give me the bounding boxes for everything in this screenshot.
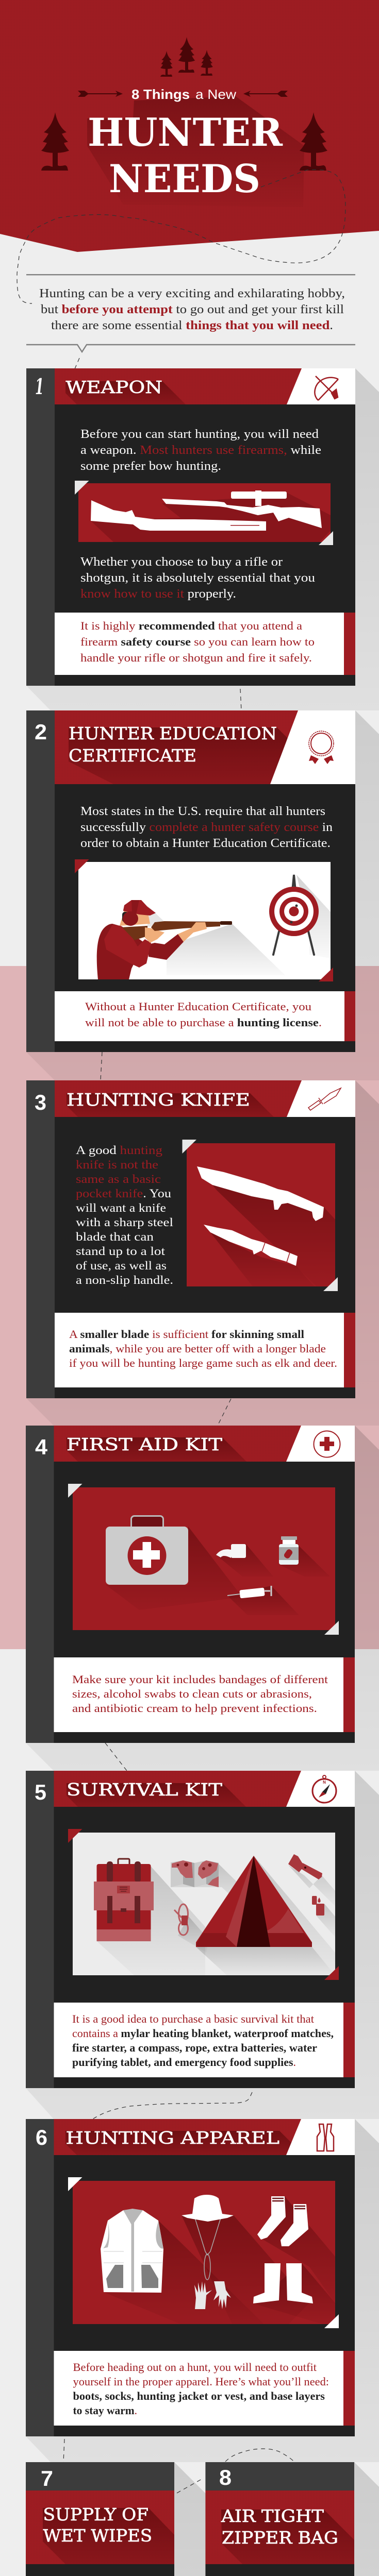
image: rifle and shotgun: [75, 481, 333, 545]
callout: [54, 2351, 355, 2426]
icon: three small pine trees: [160, 37, 213, 77]
number: 3: [35, 1090, 46, 1114]
number: 1: [35, 374, 44, 399]
callout: [55, 1313, 355, 1387]
callout: contains a mylar heating blanket, waterproof matches,: [72, 2027, 334, 2040]
target: [269, 875, 319, 955]
callout: [55, 613, 355, 675]
callout: [54, 1657, 355, 1732]
image: hunting apparel items: [68, 2177, 339, 2328]
number: 6: [36, 2125, 47, 2149]
heading: [221, 2506, 338, 2548]
callout: handle your rifle or shotgun and fire it safely.: [80, 651, 312, 664]
panel: 3 hunting knife: [26, 1080, 355, 1398]
callout: [55, 991, 355, 1041]
text block: stand up to a lot: [76, 1245, 166, 1258]
heading: WEAPON: [66, 377, 162, 397]
number: 2: [35, 720, 47, 744]
callout: firearm safety course so you can learn how to: [80, 635, 315, 648]
icon: rosette: [309, 731, 334, 764]
text block: a weapon. Most hunters use firearms, while: [80, 444, 321, 457]
title: [88, 110, 283, 201]
icon: lighter: [312, 1896, 324, 1916]
callout: animals, while you are better off with a longer blade: [69, 1342, 326, 1355]
icon: flashlight: [288, 1854, 322, 1879]
text block: shotgun, it is absolutely essential that you: [80, 571, 315, 585]
panel: 7 supply of wet wipes: [26, 2462, 174, 2576]
image: hunter aiming at target: [75, 859, 333, 981]
heading: SUPPLY OF: [43, 2504, 149, 2524]
number: 8: [219, 2465, 232, 2489]
icon: compass: N: [323, 1780, 326, 1785]
header bar: [54, 2119, 355, 2155]
icon: tent: [196, 1856, 312, 1947]
panel: 4 first aid kit: [26, 1426, 355, 1743]
header bar: [54, 1771, 355, 1807]
callout: will not be able to purchase a hunting license .: [85, 1016, 322, 1029]
number: 7: [41, 2466, 53, 2490]
icon: vest: [101, 2209, 163, 2293]
icon: syringe: [227, 1586, 271, 1598]
text block: [80, 805, 333, 850]
heading: SURVIVAL KIT: [67, 1780, 222, 1800]
image: two knives: [183, 1140, 338, 1291]
number: 4: [35, 1435, 48, 1459]
heading: HUNTER EDUCATION: [69, 723, 277, 743]
text block: [80, 428, 321, 473]
icon: hat: [182, 2195, 234, 2280]
header bar: [26, 2490, 174, 2564]
subtitle: 8 Things: [131, 87, 190, 102]
intro panel: [26, 274, 355, 352]
icon: bow and arrow: [315, 376, 338, 400]
text block: Most states in the U.S. require that all hunters: [80, 805, 325, 818]
intro text: there are some essential things that you will need .: [51, 319, 333, 332]
text block: will want a knife: [76, 1201, 166, 1214]
icon: boots: [253, 2263, 313, 2303]
text block: some prefer bow hunting.: [80, 460, 221, 473]
icon: bandage roll: [216, 1544, 246, 1558]
icon: vest: [317, 2124, 334, 2151]
text block: blade that can: [76, 1230, 154, 1243]
arrow: left of subtitle: [78, 91, 123, 97]
icon: backpack: [94, 1859, 154, 1941]
icon: right large pine tree: [300, 112, 327, 171]
heading: [43, 2504, 152, 2546]
callout: fire starter, a compass, rope, extra batteries, water: [72, 2041, 317, 2054]
text block: knife is not the: [76, 1158, 158, 1171]
heading: HUNTING KNIFE: [67, 1090, 250, 1110]
callout: if you will be hunting large game such as elk and deer.: [69, 1357, 337, 1369]
callout: Make sure your kit includes bandages of different: [72, 1673, 328, 1686]
icon: pill bottle: [279, 1536, 299, 1565]
text block: [80, 555, 315, 601]
heading: AIR TIGHT: [221, 2506, 324, 2526]
callout: sizes, alcohol swabs to clean cuts or abrasions,: [72, 1687, 312, 1700]
icon: medkit: [106, 1516, 188, 1585]
image: first aid supplies: [68, 1484, 339, 1635]
callout: Without a Hunter Education Certificate, you: [85, 1000, 311, 1013]
text block: pocket knife . You: [76, 1187, 172, 1200]
text block: order to obtain a Hunter Education Certificate.: [80, 837, 331, 850]
header bar: [55, 710, 355, 784]
text block: same as a basic: [76, 1173, 161, 1185]
callout: [54, 2003, 355, 2077]
callout: A smaller blade is sufficient for skinning small: [69, 1328, 304, 1341]
panel: 8 air tight zipper bag: [205, 2462, 354, 2576]
text block: with a sharp steel: [76, 1216, 173, 1229]
callout: It is highly recommended that you attend a: [80, 619, 302, 632]
icon: rope: [174, 1904, 188, 1935]
text block: of use, as well as: [76, 1259, 167, 1272]
number: 5: [35, 1780, 46, 1804]
text block: A good hunting: [76, 1144, 163, 1157]
icon: gloves: [194, 2281, 231, 2309]
image: survival gear: [68, 1829, 339, 1980]
callout: It is a good idea to purchase a basic survival kit that: [72, 2012, 314, 2025]
icon: medical cross: [314, 1431, 340, 1457]
text block: a non-slip handle.: [76, 1274, 173, 1286]
hero banner: [0, 0, 379, 252]
icon: map: [171, 1860, 219, 1887]
text block: Before you can start hunting, you will need: [80, 428, 319, 441]
title: HUNTER: [88, 110, 283, 155]
callout: Before heading out on a hunt, you will need to outfit: [73, 2361, 317, 2374]
callout: and antibiotic cream to help prevent infections.: [72, 1702, 317, 1715]
panel: 5 survival kit: [26, 1771, 355, 2088]
callout: purifying tablet, and emergency food supplies.: [72, 2056, 296, 2069]
callout: boots, socks, hunting jacket or vest, and base layers: [73, 2389, 325, 2402]
header bar: [205, 2490, 354, 2564]
icon: socks: [257, 2196, 308, 2246]
text block: [76, 1144, 173, 1286]
subtitle: a New: [195, 87, 236, 102]
callout: to stay warm.: [73, 2404, 137, 2417]
heading: FIRST AID KIT: [67, 1434, 222, 1454]
text block: know how to use it properly.: [80, 587, 236, 601]
icon: knife: [308, 1088, 341, 1110]
subtitle: [131, 87, 236, 102]
panel: 2 hunter education certificate: [26, 710, 355, 1052]
intro text: Hunting can be a very exciting and exhilarating hobby,: [39, 287, 345, 300]
arrow: right of subtitle: [243, 91, 288, 97]
header bar: [54, 1426, 355, 1462]
icon: left large pine tree: [41, 112, 69, 171]
heading: ZIPPER BAG: [222, 2528, 338, 2548]
callout: yourself in the proper apparel. Here’s what you’ll need:: [73, 2375, 329, 2388]
title: NEEDS: [109, 156, 260, 201]
heading: [69, 723, 277, 766]
icon: compass: [312, 1775, 336, 1803]
text block: successfully complete a hunter safety course in: [80, 821, 333, 834]
intro text: [39, 287, 345, 332]
header bar: [55, 368, 355, 404]
header bar: [55, 1080, 355, 1117]
heading: WET WIPES: [43, 2526, 152, 2546]
panel: 6 hunting apparel: [26, 2119, 355, 2436]
intro text: but before you attempt to go out and get your first kill: [41, 303, 344, 316]
heading: HUNTING APPAREL: [66, 2128, 279, 2148]
panel: 1 weapon: [26, 368, 355, 686]
heading: CERTIFICATE: [69, 745, 196, 766]
hunter: [97, 900, 232, 979]
text block: Whether you choose to buy a rifle or: [80, 555, 283, 569]
